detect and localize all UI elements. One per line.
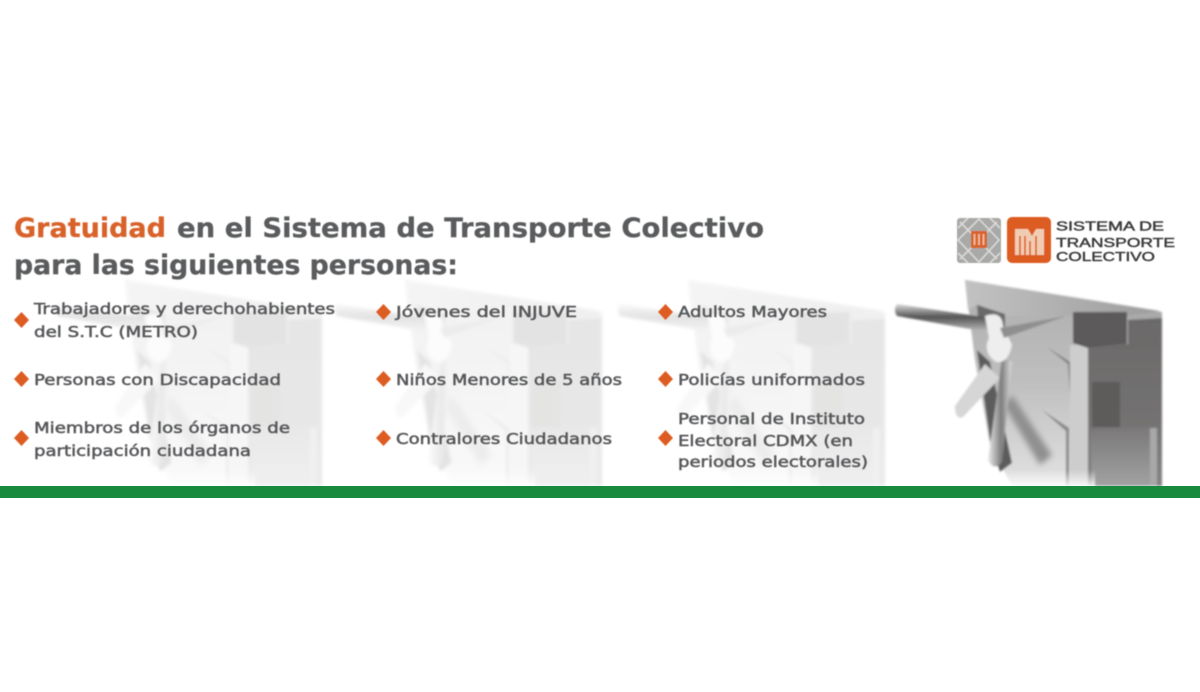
- title: [14, 213, 764, 281]
- bullet: adultos: [658, 304, 673, 320]
- item: personal de instituto electoral: Personal de Instituto: [678, 410, 865, 428]
- title: en el Sistema de Transporte Colectivo: [177, 213, 764, 244]
- list column 2: [376, 303, 622, 448]
- bullet: policias: [658, 371, 673, 387]
- icon: orange metro logo: [1007, 217, 1051, 263]
- logo wordmark: [1056, 218, 1175, 264]
- item: adultos mayores: Adultos Mayores: [678, 303, 827, 321]
- item: trabajadores y derechohabientes: [33, 300, 335, 341]
- item: trabajadores y derechohabientes: del S.T.C (METRO): [34, 323, 198, 341]
- logo wordmark: COLECTIVO: [1056, 249, 1155, 264]
- icon: grey patterned emblem: [957, 218, 1001, 263]
- item: personas con discapacidad: Personas con Discapacidad: [34, 371, 281, 389]
- item: policias uniformados: Policías uniformados: [678, 371, 865, 389]
- title: para las siguientes personas:: [14, 250, 458, 281]
- bullet: trabajadores: [14, 312, 29, 328]
- item: personal de instituto electoral: [678, 410, 868, 471]
- ghost turnstile left: [55, 280, 322, 488]
- bullet: miembros: [14, 430, 29, 446]
- bullet: discapacidad: [14, 371, 29, 387]
- item: ninos menores de 5 anos: Niños Menores de 5 años: [396, 371, 622, 389]
- item: miembros de los organos: participación ciudadana: [34, 442, 251, 460]
- logo wordmark: SISTEMA DE: [1056, 218, 1164, 234]
- item: contralores ciudadanos: Contralores Ciudadanos: [396, 430, 612, 448]
- item: jovenes del injuve: Jóvenes del INJUVE: [395, 303, 577, 321]
- bullet: contralores: [376, 430, 391, 446]
- item: miembros de los organos: Miembros de los órganos de: [34, 419, 290, 437]
- item: personal de instituto electoral: Electoral CDMX (en: [678, 432, 853, 450]
- title: Gratuidad: [14, 213, 166, 244]
- green footer bar: [0, 486, 1200, 498]
- item: personal de instituto electoral: periodos electorales): [678, 453, 868, 471]
- list column 1: [14, 300, 335, 460]
- list column 3: [658, 303, 868, 471]
- item: miembros de los organos: [34, 419, 290, 460]
- ghost turnstile centre: [335, 280, 602, 488]
- turnstile photo: [895, 280, 1162, 488]
- ghost turnstile right: [618, 280, 885, 488]
- bullet: personal: [658, 430, 673, 446]
- logos: metro and sistema de transporte colectivo: [957, 217, 1175, 264]
- logo wordmark: TRANSPORTE: [1056, 235, 1175, 250]
- bullet: ninos: [376, 371, 391, 387]
- bullet: jovenes: [376, 304, 391, 320]
- item: trabajadores y derechohabientes: Trabajadores y derechohabientes: [33, 300, 335, 318]
